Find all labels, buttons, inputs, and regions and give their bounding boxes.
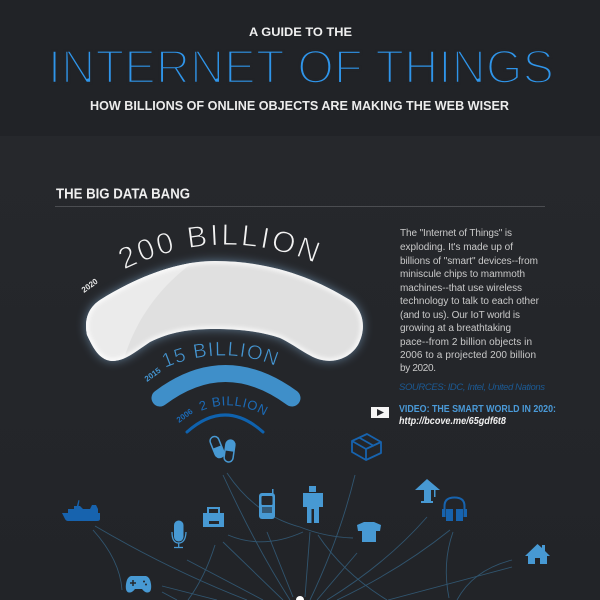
body text: billions of "smart" devices--from [400, 256, 538, 267]
video callout [371, 404, 556, 427]
icon: lamp [415, 479, 440, 503]
subtitle: HOW BILLIONS OF ONLINE OBJECTS ARE MAKING THE WEB WISER [90, 99, 509, 113]
network lines [93, 473, 512, 600]
label: 2 billion: 2 BILLION [199, 396, 268, 416]
large arc: 200 billion [80, 258, 363, 370]
kicker: A GUIDE TO THE [249, 25, 352, 39]
header [48, 25, 554, 113]
main title: INTERNET OF THINGS [48, 40, 554, 93]
label: 2006: 2006 [175, 407, 195, 425]
background [0, 136, 600, 600]
icon: printer [203, 507, 224, 527]
icon: microphone [172, 520, 186, 548]
body text: by 2020. [400, 363, 436, 374]
chart: wifi arcs of connected objects [80, 224, 370, 434]
body text: pace--from 2 billion objects in [400, 337, 532, 348]
icon: game controller [126, 576, 151, 593]
body text: growing at a breathtaking [400, 323, 511, 334]
body text: machines--that use wireless [400, 283, 522, 294]
body text: miniscule chips to mammoth [400, 269, 525, 280]
icon: play button [371, 407, 389, 418]
sources: SOURCES: IDC, Intel, United Nations [399, 382, 545, 393]
body text: 2006 to a projected 200 billion [400, 350, 536, 361]
header band [0, 0, 600, 136]
video link: http://bcove.me/65gdf6t8 [399, 416, 506, 427]
body text: technology to talk to each other [400, 296, 540, 307]
video title: VIDEO: THE SMART WORLD IN 2020: [399, 404, 556, 415]
icon: ship [62, 500, 100, 521]
label: 15 billion: 15 BILLION [162, 342, 278, 368]
body text: The "Internet of Things" is [400, 228, 512, 239]
body text: (and to us). Our IoT world is [400, 310, 520, 321]
body text: exploding. It's made up of [400, 242, 513, 253]
hub [296, 596, 304, 600]
icon: house [525, 544, 550, 564]
label: 2015: 2015 [143, 366, 163, 384]
icon: mobile phone [259, 489, 275, 519]
icon: package box [352, 434, 381, 460]
small arc: 2 billion [187, 415, 263, 432]
icon: robot figure [303, 486, 323, 523]
medium arc: 15 billion [160, 374, 292, 398]
icon: t-shirt [357, 522, 381, 542]
icon: pills [209, 435, 235, 463]
section heading: THE BIG DATA BANG [56, 186, 190, 202]
body text [400, 228, 540, 374]
icon: headphones [442, 498, 467, 521]
label: 2020: 2020 [80, 277, 100, 295]
label: 200 billion: 200 BILLION [119, 224, 320, 268]
